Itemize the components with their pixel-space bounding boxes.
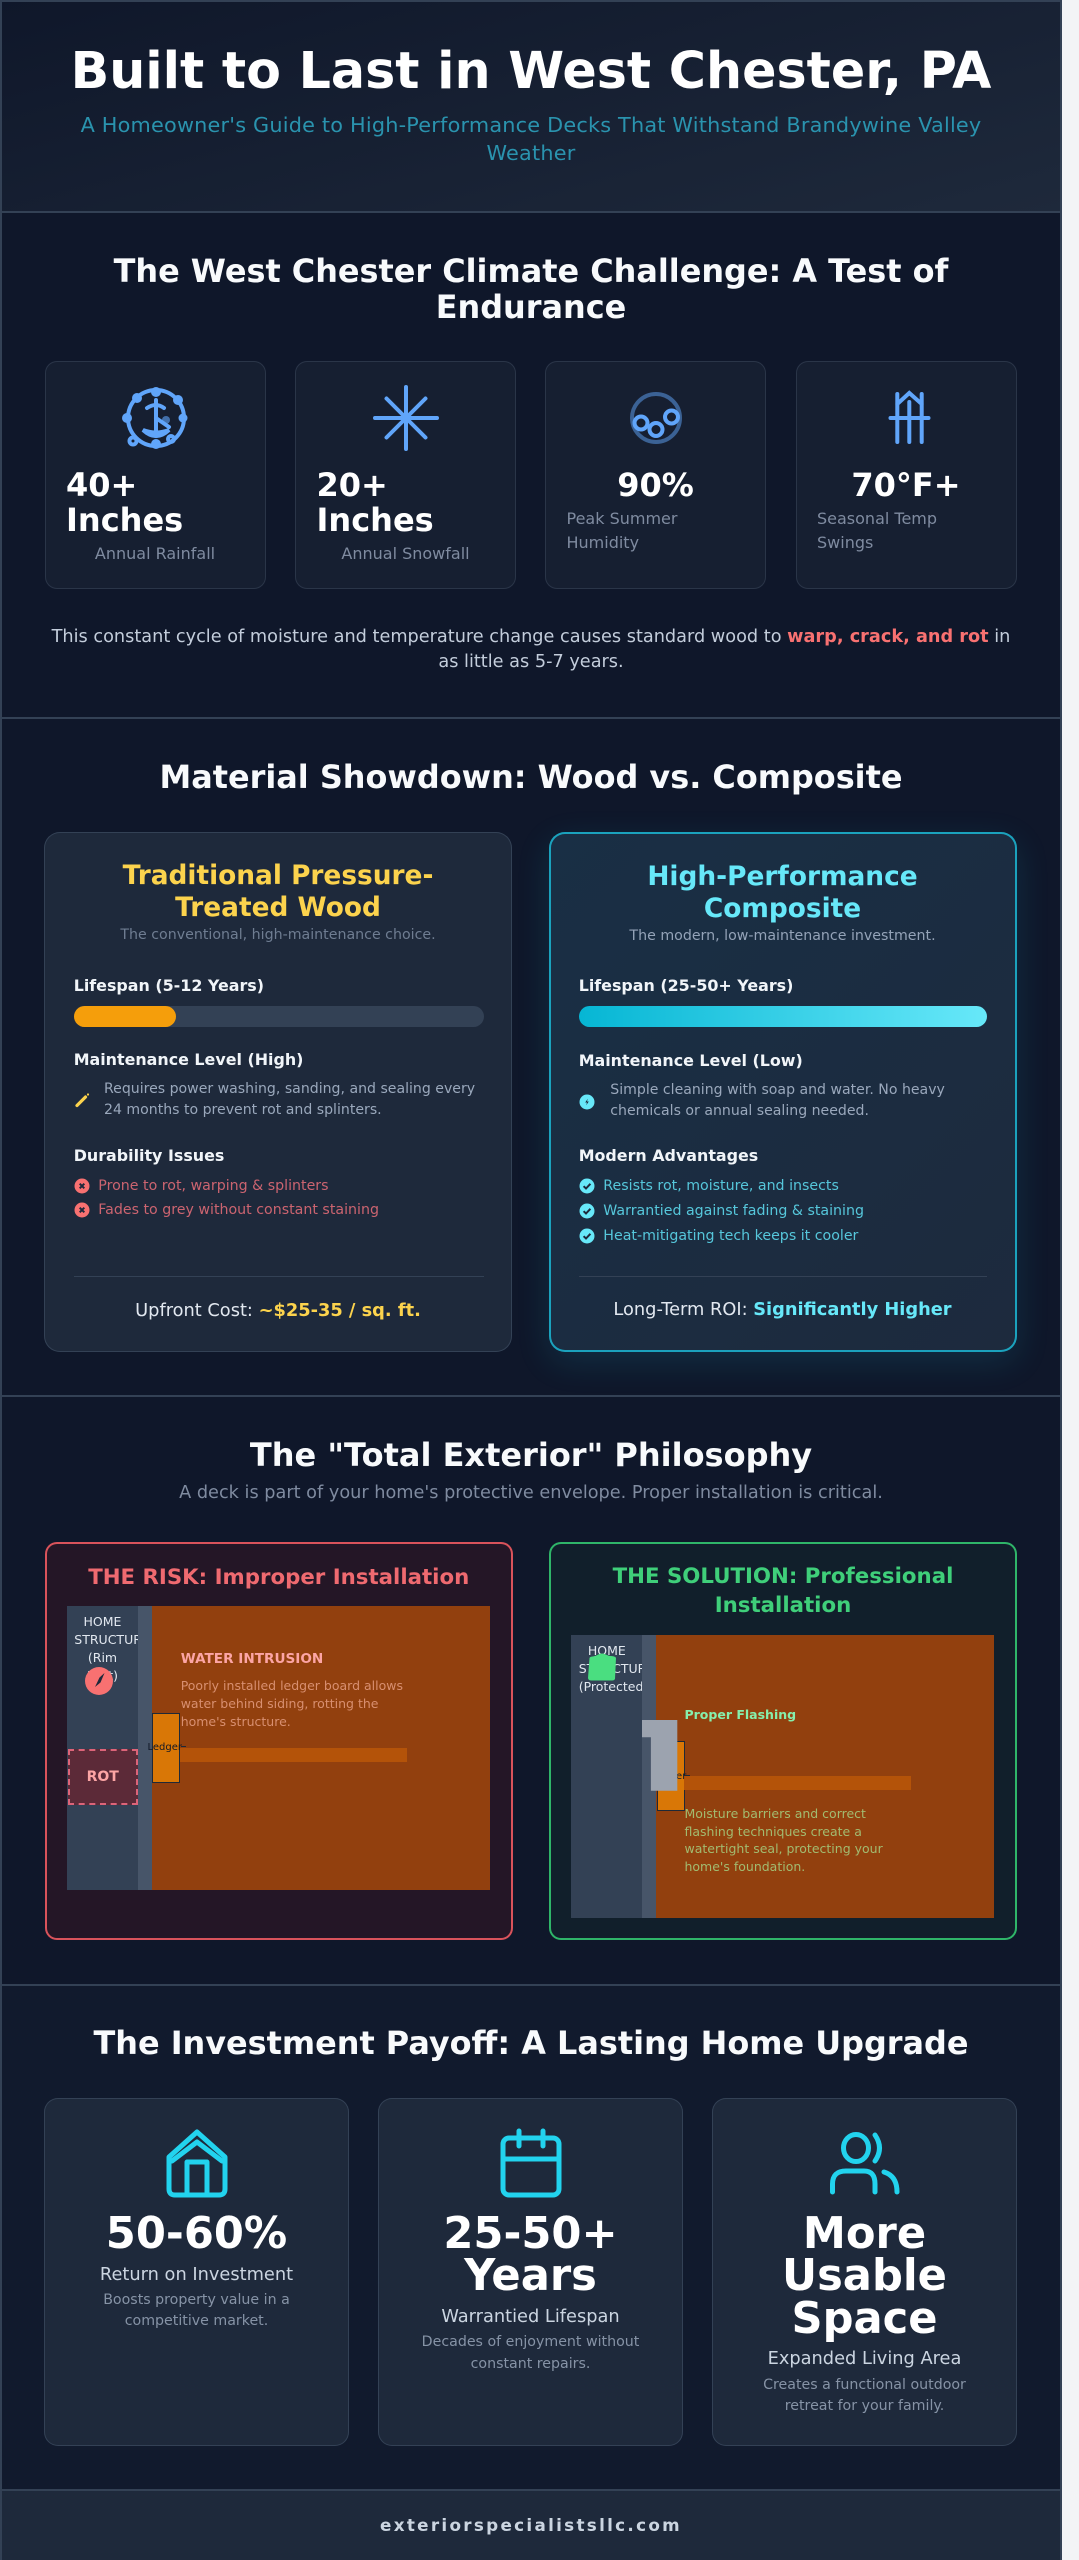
wood maintenance text — [104, 1081, 475, 1118]
wood maintenance label: Maintenance Level (High) — [74, 1050, 303, 1069]
wood title: Traditional Pressure- — [123, 860, 433, 891]
icon: water warning — [85, 1667, 113, 1695]
philosophy subtitle: A deck is part of your home's protective envelope. Proper installation is critical. — [179, 1483, 883, 1503]
icon: cross — [74, 1178, 90, 1194]
stat: humidity label: Humidity — [566, 533, 639, 552]
composite title: High-Performance — [647, 861, 918, 892]
space value: Space — [791, 2294, 938, 2344]
space description: retreat for your family. — [785, 2398, 944, 2414]
stat card: snowfall — [295, 361, 516, 589]
lifespan value: Years — [464, 2251, 597, 2301]
footer link text: exteriorspecialistsllc.com — [380, 2515, 682, 2535]
card: warrantied lifespan — [378, 2098, 683, 2446]
rot zone — [68, 1749, 138, 1805]
stat card: humidity — [545, 361, 766, 589]
solution title — [612, 1564, 953, 1618]
water intrusion text: Poorly installed ledger board allows — [181, 1678, 403, 1693]
stat: temperature label — [817, 509, 937, 552]
stat: temperature label: Seasonal Temp — [817, 509, 937, 528]
advantages label: Modern Advantages — [579, 1146, 758, 1165]
showdown heading: Material Showdown: Wood vs. Composite — [160, 758, 902, 796]
icon: check — [580, 1178, 594, 1194]
subtitle — [80, 113, 981, 165]
solution text: watertight seal, protecting your — [684, 1841, 883, 1856]
water intrusion text: home's structure. — [181, 1714, 291, 1729]
roi value: 50-60% — [106, 2209, 287, 2259]
advantage text: Heat-mitigating tech keeps it cooler — [603, 1228, 858, 1244]
wood lifespan label: Lifespan (5-12 Years) — [74, 976, 264, 995]
solution title: THE SOLUTION: Professional — [613, 1564, 953, 1589]
upfront cost: Upfront Cost: ~$25-35 / sq. ft. — [135, 1300, 421, 1321]
composite maintenance text: Simple cleaning with soap and water. No heavy — [610, 1082, 945, 1098]
stat: humidity label — [566, 509, 678, 552]
lifespan value: 25-50+ — [443, 2209, 618, 2259]
durability label: Durability Issues — [74, 1146, 224, 1165]
lifespan label: Warrantied Lifespan — [441, 2306, 620, 2327]
stat: snowfall value: Inches — [316, 501, 434, 539]
space label: Expanded Living Area — [768, 2348, 961, 2369]
ledger board — [657, 1741, 685, 1811]
philosophy heading: The "Total Exterior" Philosophy — [250, 1436, 812, 1474]
solution text: flashing techniques create a — [684, 1824, 862, 1839]
rot zone: ROT — [87, 1769, 119, 1785]
stat: rainfall value: Inches — [66, 501, 183, 539]
diagram: professional installation — [571, 1635, 994, 1918]
icon: calendar — [500, 2128, 562, 2198]
stat: snowfall label: Annual Snowfall — [341, 544, 470, 563]
panel: high-performance composite — [548, 832, 1016, 1352]
panel: the solution — [549, 1542, 1017, 1940]
ledger board — [152, 1713, 180, 1783]
icon: shield — [588, 1654, 616, 1680]
stat card: rainfall — [44, 361, 266, 589]
lifespan value — [443, 2209, 618, 2301]
climate note: as little as 5-7 years. — [438, 652, 624, 672]
space description — [712, 2375, 1017, 2417]
stat: rainfall value — [66, 466, 183, 539]
roi description — [103, 2292, 290, 2329]
solution text — [684, 1806, 883, 1874]
space description: Creates a functional outdoor — [763, 2377, 966, 2393]
footer — [0, 2489, 1062, 2560]
card: usable space — [712, 2098, 1017, 2446]
subtitle: A Homeowner's Guide to High-Performance Decks That Withstand Brandywine Valley — [81, 113, 981, 137]
title: Built to Last in West Chester, PA — [71, 41, 991, 100]
space value — [712, 2213, 1017, 2340]
deck joist — [180, 1748, 407, 1762]
solution title: Installation — [715, 1593, 851, 1618]
rim joist label — [87, 1650, 118, 1683]
icon: temperature swing — [888, 390, 930, 444]
composite maintenance label: Maintenance Level (Low) — [579, 1051, 803, 1070]
advantage text: Warrantied against fading & staining — [603, 1203, 864, 1219]
home label: HOME — [84, 1614, 121, 1629]
stat: humidity label: Peak Summer — [566, 509, 677, 528]
climate note: This constant cycle of moisture and temperature change causes standard wood to warp, crack, and rot in — [52, 626, 1010, 646]
icon: check — [580, 1228, 594, 1244]
stat: rainfall value: 40+ — [66, 466, 137, 504]
deck joist — [684, 1776, 911, 1790]
wood title: Treated Wood — [175, 892, 381, 923]
stat: temperature label: Swings — [817, 533, 873, 552]
wood maintenance text: 24 months to prevent rot and splinters. — [104, 1102, 382, 1118]
icon: cross — [74, 1202, 90, 1218]
roi description: competitive market. — [125, 2313, 268, 2329]
icon: people — [828, 2126, 900, 2198]
payoff heading: The Investment Payoff: A Lasting Home Upgrade — [94, 2024, 968, 2062]
home label: HOME — [588, 1643, 626, 1658]
section: climate challenge — [0, 211, 1062, 717]
composite maintenance text: chemicals or annual sealing needed. — [610, 1103, 869, 1119]
composite title — [647, 861, 918, 924]
issue text: Fades to grey without constant staining — [98, 1202, 379, 1218]
home structure — [67, 1606, 138, 1890]
section: total exterior philosophy — [0, 1395, 1062, 1984]
climate heading: Endurance — [436, 288, 626, 326]
rim joist label: Joist) — [87, 1668, 118, 1683]
issue text: Prone to rot, warping & splinters — [98, 1178, 329, 1194]
icon: rain dial — [122, 387, 188, 449]
wood lifespan fill — [74, 1006, 176, 1027]
icon: paint brush — [75, 1093, 90, 1108]
water intrusion text: water behind siding, rotting the — [181, 1696, 378, 1711]
stat card: temperature — [796, 361, 1016, 589]
card: return on investment — [44, 2098, 349, 2446]
composite subtitle: The modern, low-maintenance investment. — [629, 928, 936, 944]
issue: rot — [74, 1178, 329, 1194]
header — [0, 0, 1062, 211]
icon: house — [166, 2129, 228, 2198]
wood subtitle: The conventional, high-maintenance choice. — [120, 927, 436, 943]
risk title: THE RISK: Improper Installation — [88, 1565, 469, 1590]
icon: check — [580, 1204, 594, 1218]
stat: humidity value: 90% — [617, 466, 694, 504]
panel: pressure-treated wood — [44, 832, 512, 1352]
roi label: Return on Investment — [100, 2264, 293, 2285]
advantage: warranty — [580, 1203, 864, 1219]
solution text: Moisture barriers and correct — [684, 1806, 866, 1821]
water intrusion text — [181, 1678, 403, 1729]
wood lifespan bar — [74, 1006, 484, 1027]
stat: temperature value: 70°F+ — [851, 466, 961, 504]
composite maintenance text — [610, 1082, 945, 1119]
panel: the risk — [44, 1542, 513, 1940]
home structure — [571, 1635, 642, 1918]
composite lifespan bar — [579, 1006, 987, 1027]
proper flashing label: Proper Flashing — [684, 1707, 796, 1722]
lifespan description: Decades of enjoyment without — [422, 2334, 639, 2350]
icon: humidity bubbles — [630, 392, 682, 444]
advantage text: Resists rot, moisture, and insects — [603, 1178, 839, 1194]
climate heading — [114, 252, 949, 326]
advantage: heat — [580, 1228, 858, 1244]
long-term ROI: Long-Term ROI: Significantly Higher — [613, 1299, 952, 1320]
icon: sparkle drop — [580, 1094, 594, 1110]
diagram: improper installation — [67, 1606, 490, 1890]
flashing — [642, 1720, 678, 1791]
advantage: resists rot — [580, 1178, 839, 1194]
stat: snowfall value: 20+ — [316, 466, 388, 504]
section: investment payoff — [0, 1984, 1062, 2489]
solution text: home's foundation. — [684, 1859, 805, 1874]
icon: snowflake — [373, 385, 439, 451]
stat: snowfall value — [316, 466, 434, 539]
section: material showdown — [0, 717, 1062, 1395]
lifespan description — [378, 2332, 683, 2375]
water intrusion heading: WATER INTRUSION — [181, 1651, 323, 1667]
climate heading: The West Chester Climate Challenge: A Test of — [114, 252, 948, 290]
wood maintenance text: Requires power washing, sanding, and sealing every — [104, 1081, 475, 1097]
subtitle: Weather — [487, 141, 575, 165]
wood title — [122, 860, 433, 923]
composite title: Composite — [704, 893, 861, 924]
ledger label: Ledger — [148, 1742, 182, 1753]
lifespan description: constant repairs. — [471, 2356, 590, 2372]
issue: fading — [74, 1202, 379, 1218]
stat: rainfall label: Annual Rainfall — [95, 544, 215, 563]
climate note — [52, 626, 1010, 672]
ledger label: Ledger — [652, 1771, 686, 1782]
roi description: Boosts property value in a — [103, 2292, 290, 2308]
rim joist label: (Rim — [88, 1650, 117, 1665]
space value: Usable — [782, 2251, 947, 2301]
space value: More — [803, 2209, 926, 2259]
composite lifespan label: Lifespan (25-50+ Years) — [579, 976, 793, 995]
